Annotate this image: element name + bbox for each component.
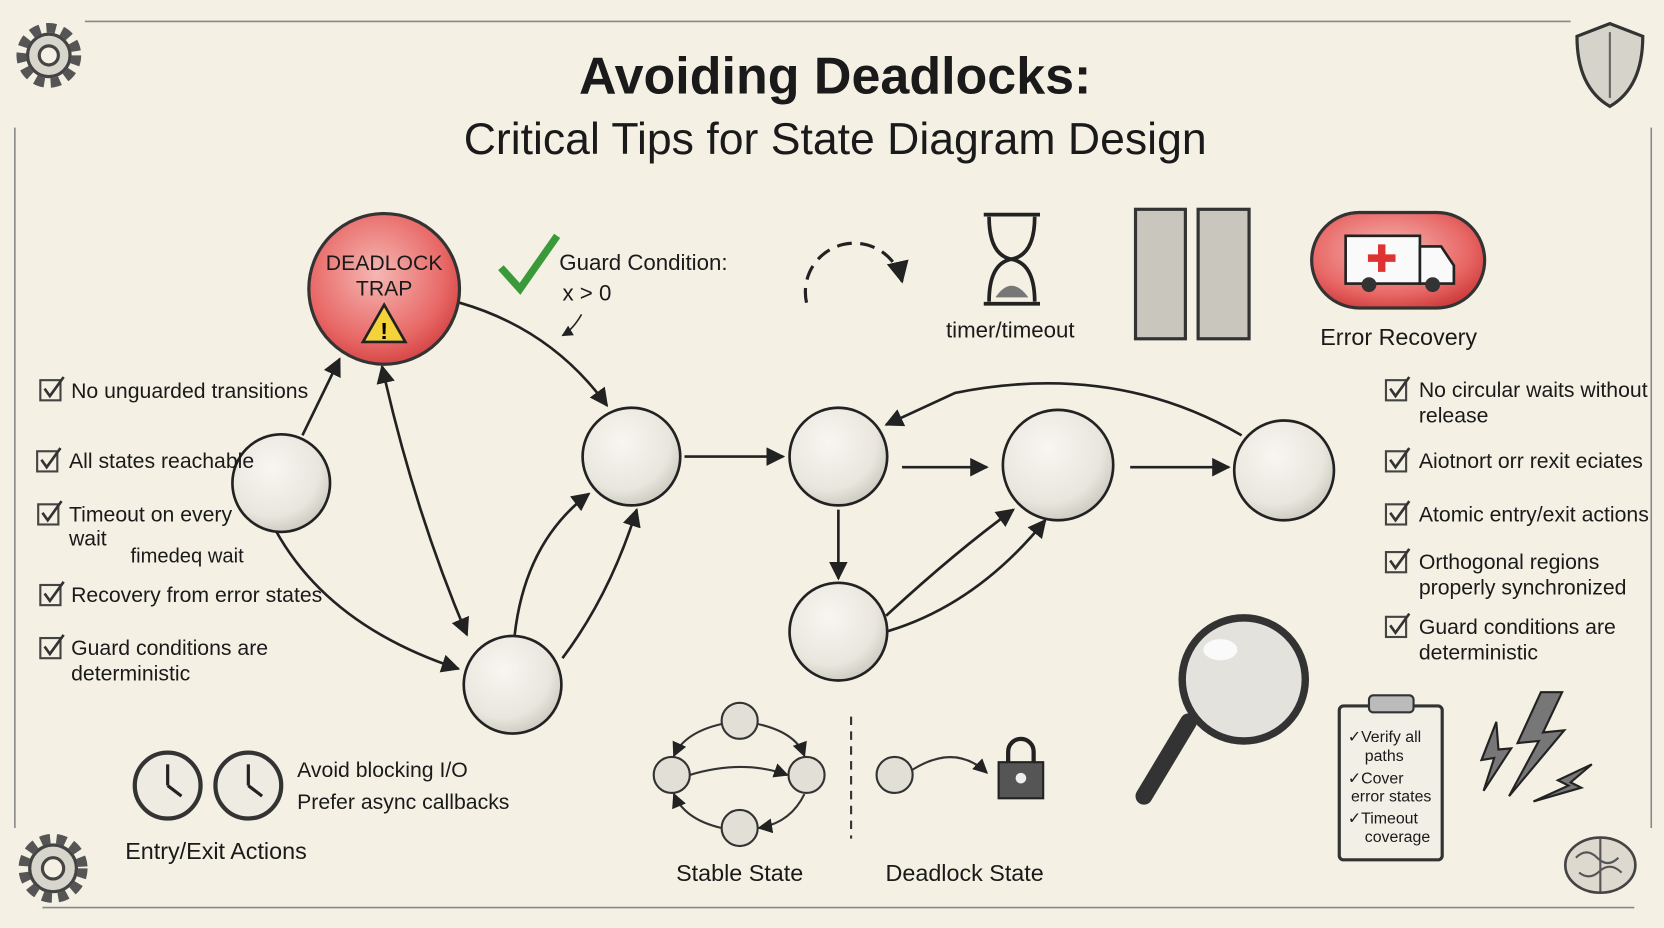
clocks + entry/exit: Prefer async callbacks [297, 791, 509, 814]
right checklist: Guard conditions are [1419, 616, 1616, 639]
left checklist: Timeout on every [69, 503, 233, 526]
icon: lightning [1481, 692, 1592, 801]
left checklist: fimedeq wait [131, 546, 244, 568]
clipboard: ✓Cover [1348, 770, 1404, 787]
clocks + entry/exit: Avoid blocking I/O [297, 759, 468, 782]
clipboard: paths [1365, 748, 1404, 765]
icon: hourglass timer [946, 215, 1075, 343]
left checklist: Recovery from error states [71, 584, 322, 607]
right checklist: No circular waits without [1419, 379, 1648, 402]
deadlock trap: DEADLOCK [326, 252, 443, 275]
deadlock state [877, 739, 1044, 886]
state nodes [232, 408, 1334, 734]
deadlock state: Deadlock State [886, 860, 1044, 886]
right checklist: Aiotnort orr rexit eciates [1419, 450, 1643, 473]
icon: cycle arrow [805, 243, 902, 303]
icon: gear top-left [21, 28, 76, 83]
clocks + entry/exit: Entry/Exit Actions [125, 838, 307, 864]
guard condition [501, 236, 728, 336]
clipboard [1339, 695, 1442, 860]
left checklist [37, 377, 322, 685]
title [464, 48, 1207, 164]
guard condition: Guard Condition: [559, 250, 728, 275]
deadlock trap [309, 214, 460, 364]
right checklist: deterministic [1419, 641, 1538, 664]
deadlock trap: ! [380, 318, 388, 344]
error recovery: Error Recovery [1320, 324, 1477, 350]
right checklist [1386, 377, 1649, 664]
stable state [654, 703, 825, 886]
right checklist: Orthogonal regions [1419, 551, 1599, 574]
clipboard: ✓Verify all [1348, 729, 1421, 746]
right checklist: release [1419, 405, 1488, 428]
right checklist: Atomic entry/exit actions [1419, 503, 1649, 526]
edges [276, 303, 1242, 669]
title: Avoiding Deadlocks: [579, 48, 1091, 106]
left checklist: wait [68, 528, 107, 551]
error recovery [1312, 212, 1485, 350]
clipboard: coverage [1365, 829, 1430, 846]
icon: magnifier [1144, 618, 1305, 796]
stable state: Stable State [676, 860, 803, 886]
icon: gear bottom-left [23, 839, 83, 898]
deadlock trap: TRAP [356, 277, 412, 300]
left checklist: All states reachable [69, 450, 254, 473]
clipboard: ✓Timeout [1348, 811, 1419, 828]
icon: hourglass timer: timer/timeout [946, 318, 1075, 343]
icon: brain [1565, 838, 1635, 893]
icon: shield [1577, 24, 1643, 106]
left checklist: No unguarded transitions [71, 380, 308, 403]
clipboard: error states [1351, 788, 1431, 805]
guard condition: x > 0 [562, 281, 611, 306]
left checklist: Guard conditions are [71, 637, 268, 660]
right checklist: properly synchronized [1419, 577, 1626, 600]
left checklist: deterministic [71, 662, 191, 685]
clocks + entry/exit [125, 753, 509, 864]
title: Critical Tips for State Diagram Design [464, 115, 1207, 164]
icon: pause bars [1136, 209, 1249, 339]
